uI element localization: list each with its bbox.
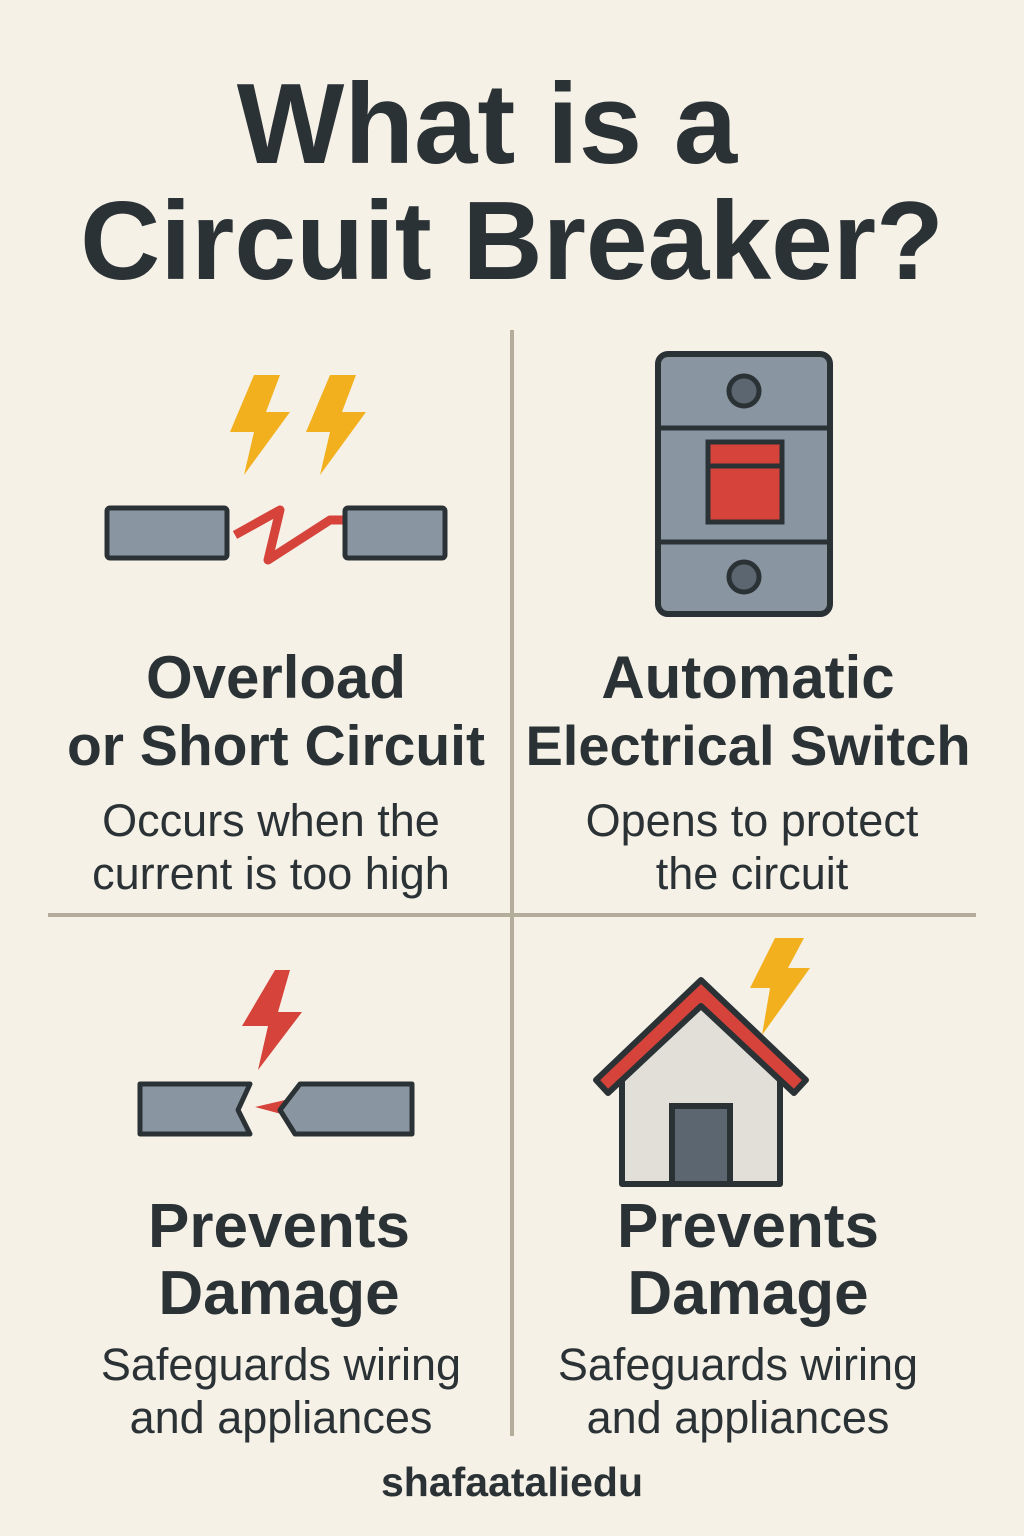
footer credit: shafaataliedu bbox=[381, 1459, 643, 1505]
body text bbox=[101, 1339, 461, 1443]
title bbox=[80, 61, 944, 303]
heading bbox=[617, 1192, 879, 1328]
body text: Safeguards wiring bbox=[558, 1339, 918, 1390]
title: Circuit Breaker? bbox=[80, 179, 944, 303]
body text: current is too high bbox=[92, 848, 450, 899]
body text: and appliances bbox=[587, 1392, 889, 1443]
heading: Electrical Switch bbox=[525, 714, 971, 777]
body text: and appliances bbox=[130, 1392, 432, 1443]
title: What is a bbox=[237, 61, 737, 188]
icon: broken wire with sparks bbox=[104, 375, 448, 564]
body text bbox=[558, 1339, 918, 1443]
heading: Prevents bbox=[148, 1192, 410, 1261]
panel: prevents damage home bbox=[558, 938, 918, 1443]
heading: Prevents bbox=[617, 1192, 879, 1261]
heading: or Short Circuit bbox=[67, 714, 485, 778]
body text: Safeguards wiring bbox=[101, 1339, 461, 1390]
heading: Damage bbox=[627, 1259, 869, 1328]
heading bbox=[525, 644, 971, 777]
heading bbox=[148, 1192, 410, 1328]
body text: the circuit bbox=[656, 848, 848, 899]
panel: prevents damage wiring bbox=[101, 970, 461, 1443]
body text: Occurs when the bbox=[102, 795, 440, 846]
icon: house with bolt bbox=[593, 938, 810, 1187]
body text bbox=[586, 795, 918, 899]
body text bbox=[92, 795, 450, 899]
icon: breaker switch bbox=[655, 351, 833, 617]
icon: damaged wire bbox=[138, 970, 414, 1136]
heading bbox=[67, 644, 485, 778]
heading: Damage bbox=[158, 1259, 400, 1328]
panel: overload bbox=[67, 375, 485, 899]
heading: Overload bbox=[146, 644, 406, 711]
heading: Automatic bbox=[601, 644, 895, 711]
body text: Opens to protect bbox=[586, 795, 918, 846]
panel: switch bbox=[525, 351, 971, 899]
